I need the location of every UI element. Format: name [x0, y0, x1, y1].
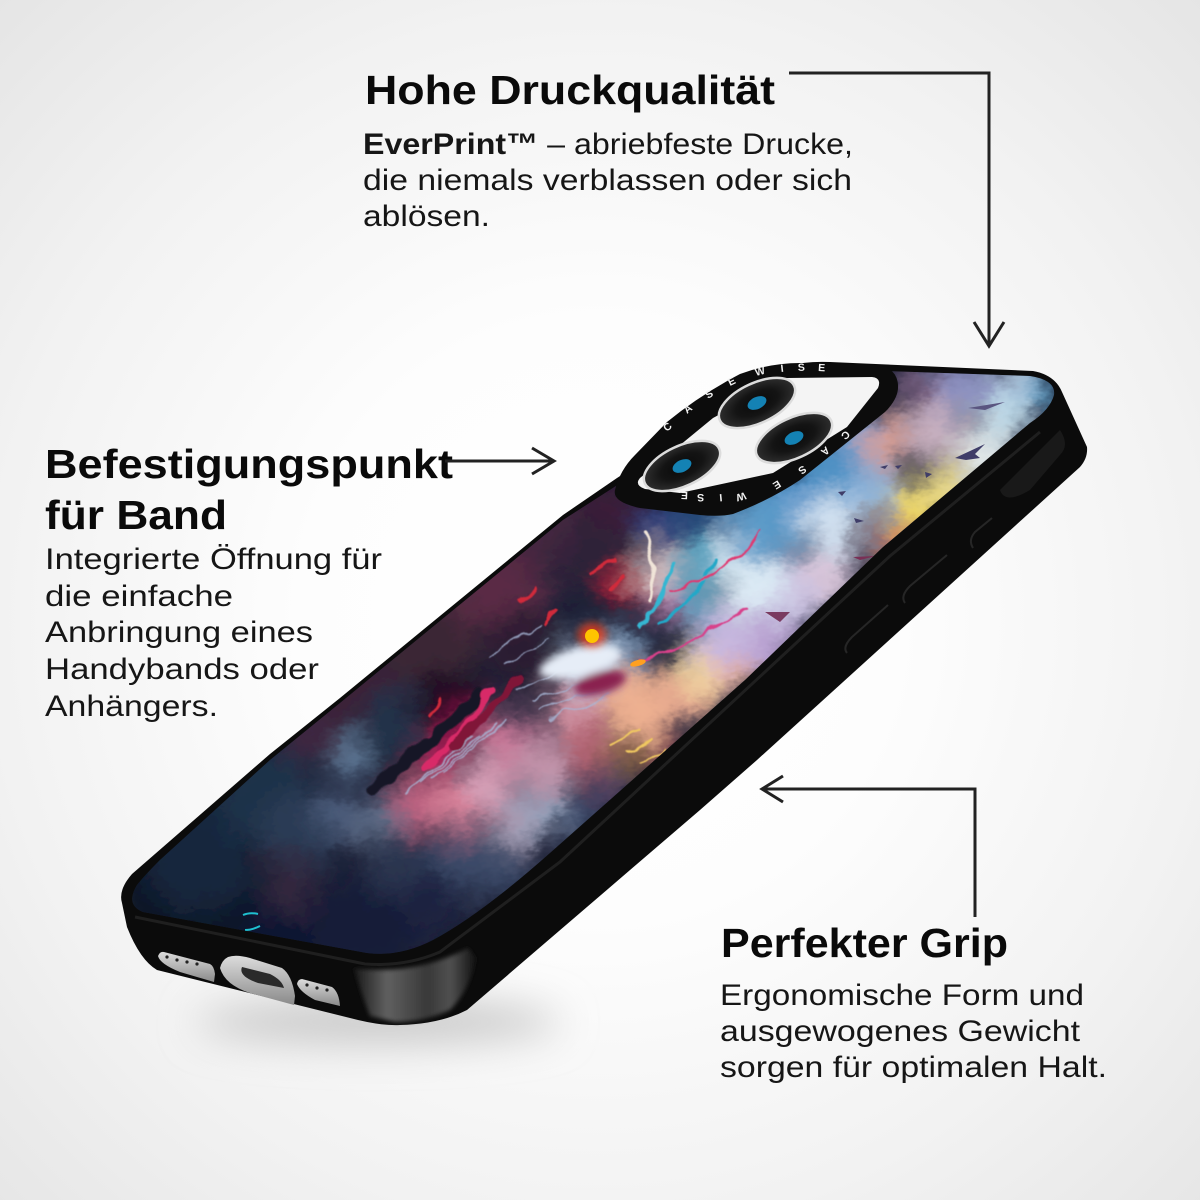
- button: volume down: [845, 605, 888, 653]
- phone case: [121, 362, 1087, 1025]
- speaker holes right: [305, 983, 329, 992]
- camera bumper: [615, 363, 898, 516]
- phone shadow: [196, 1000, 560, 1044]
- gold flecks: [610, 730, 665, 765]
- arrow: print quality: [789, 73, 1004, 346]
- heading: strap attachment: Befestigungspunkt: [45, 441, 453, 487]
- speaker holes left: [165, 955, 199, 966]
- charging port opening: [241, 967, 284, 988]
- printed artwork: [132, 371, 1054, 954]
- heading: strap attachment: [45, 441, 453, 538]
- heading: strap attachment: für Band: [45, 492, 227, 538]
- text: strap attachment: die einfache: [45, 580, 233, 613]
- magenta mane: [425, 690, 490, 768]
- teal glint: [243, 913, 260, 930]
- red embers: [430, 560, 625, 715]
- brand text bottom: CASEWISE: [681, 428, 852, 503]
- text: print quality: ablösen.: [363, 200, 490, 233]
- artwork fine strokes: [370, 530, 760, 790]
- left eye glow: [578, 623, 606, 647]
- camera plate: [638, 377, 879, 493]
- camera module: [615, 362, 898, 516]
- callout: strap attachment: [45, 441, 453, 723]
- speaker grille left: [158, 952, 215, 982]
- heading: grip: Perfekter Grip: [721, 920, 1008, 966]
- text: grip: sorgen für optimalen Halt.: [720, 1051, 1107, 1084]
- glossy bottom corner: [354, 948, 476, 1022]
- lens: top: [711, 368, 803, 438]
- blue and teal hair: [640, 530, 760, 660]
- artwork painted colour field: [132, 371, 1054, 954]
- callout: print quality: [363, 67, 853, 233]
- charging port: [220, 956, 295, 1005]
- text: grip: Ergonomische Form und: [720, 979, 1084, 1012]
- dark mane: [370, 695, 480, 790]
- side grip pad: [1000, 430, 1065, 498]
- fur streaks: [408, 625, 610, 790]
- text: grip: [720, 979, 1107, 1084]
- text: grip: ausgewogenes Gewicht: [720, 1015, 1081, 1048]
- birds in the sky: [765, 402, 1005, 622]
- text: print quality: die niemals verblassen oder sich: [363, 164, 852, 197]
- lens: left: [636, 431, 728, 501]
- left eye core: [585, 629, 599, 643]
- text: strap attachment: Handybands oder: [45, 653, 319, 686]
- right eye: [630, 659, 646, 667]
- lens: right: [748, 403, 840, 473]
- text: strap attachment: Anhängers.: [45, 690, 218, 723]
- text: print quality: EverPrint™ – abriebfeste Drucke,: [363, 128, 853, 161]
- fur muzzle: [536, 638, 629, 701]
- button: volume up: [903, 555, 947, 603]
- text: strap attachment: Integrierte Öffnung für: [45, 543, 382, 576]
- rim highlight: [135, 432, 1040, 964]
- arrow: strap attachment: [445, 448, 554, 474]
- case body: [121, 362, 1087, 1025]
- callout: grip: [720, 920, 1107, 1084]
- brand text top: CASEWISE: [661, 362, 825, 434]
- text: strap attachment: [45, 543, 382, 723]
- button: mute switch: [971, 518, 992, 548]
- speaker grille right: [297, 979, 340, 1006]
- dragon face: [536, 623, 647, 701]
- arrow: grip: [762, 776, 975, 917]
- text: strap attachment: Anbringung eines: [45, 616, 313, 649]
- text: print quality: [363, 128, 853, 233]
- heading: print quality: Hohe Druckqualität: [365, 67, 775, 113]
- artwork base: [132, 371, 1054, 954]
